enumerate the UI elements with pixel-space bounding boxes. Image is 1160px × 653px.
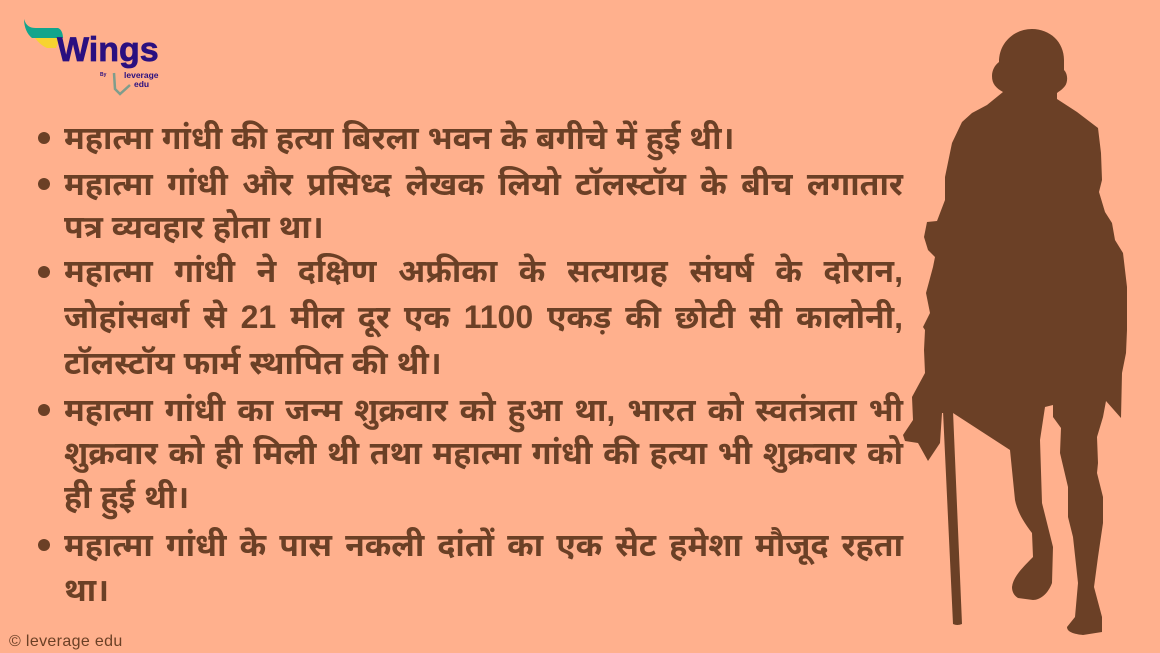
- bullet 5: [38, 527, 904, 608]
- icon: leverage edu mark: [112, 72, 131, 96]
- text: by: By: [100, 72, 106, 78]
- bullet 3: [38, 253, 903, 381]
- text: leverage edu: leverage: [124, 70, 158, 80]
- bullet 2: महात्मा गांधी और प्रसिध्द लेखक लियो टॉलस्टॉय के बीच लगातार: [64, 166, 903, 202]
- bullet 3: महात्मा गांधी ने दक्षिण अफ्रीका के सत्याग्रह संघर्ष के दोरान,: [64, 253, 903, 289]
- bullet 3: टॉलस्टॉय फार्म स्थापित की थी।: [64, 345, 442, 381]
- bullet 3: जोहांसबर्ग से 21 मील दूर एक 1100 एकड़ की छोटी सी कालोनी,: [64, 299, 903, 335]
- bullet list: [38, 120, 904, 608]
- icon: wing swoosh: [24, 19, 63, 48]
- wordmark: Wings: Wings: [57, 31, 159, 69]
- bullet 4: शुक्रवार को ही मिली थी तथा महात्मा गांधी की हत्या भी शुक्रवार को: [64, 435, 903, 471]
- logo: Wings by leverage edu: [24, 19, 159, 96]
- bullet 2: [38, 166, 904, 245]
- bullet 2: पत्र व्यवहार होता था।: [64, 209, 324, 245]
- bullet 5: महात्मा गांधी के पास नकली दांतों का एक सेट हमेशा मौजूद रहता: [64, 527, 903, 563]
- bullet 4: [38, 392, 904, 520]
- footer: copyright: © leverage edu: [9, 633, 123, 650]
- text: leverage edu: [124, 70, 158, 89]
- bullet 1: महात्मा गांधी की हत्या बिरला भवन के बगीचे में हुई थी।: [64, 120, 734, 156]
- bullet 5: था।: [64, 572, 109, 608]
- bullet 4: महात्मा गांधी का जन्म शुक्रवार को हुआ था, भारत को स्वतंत्रता भी: [64, 392, 903, 428]
- text: leverage edu: edu: [134, 79, 149, 89]
- bullet 4: ही हुई थी।: [64, 479, 189, 515]
